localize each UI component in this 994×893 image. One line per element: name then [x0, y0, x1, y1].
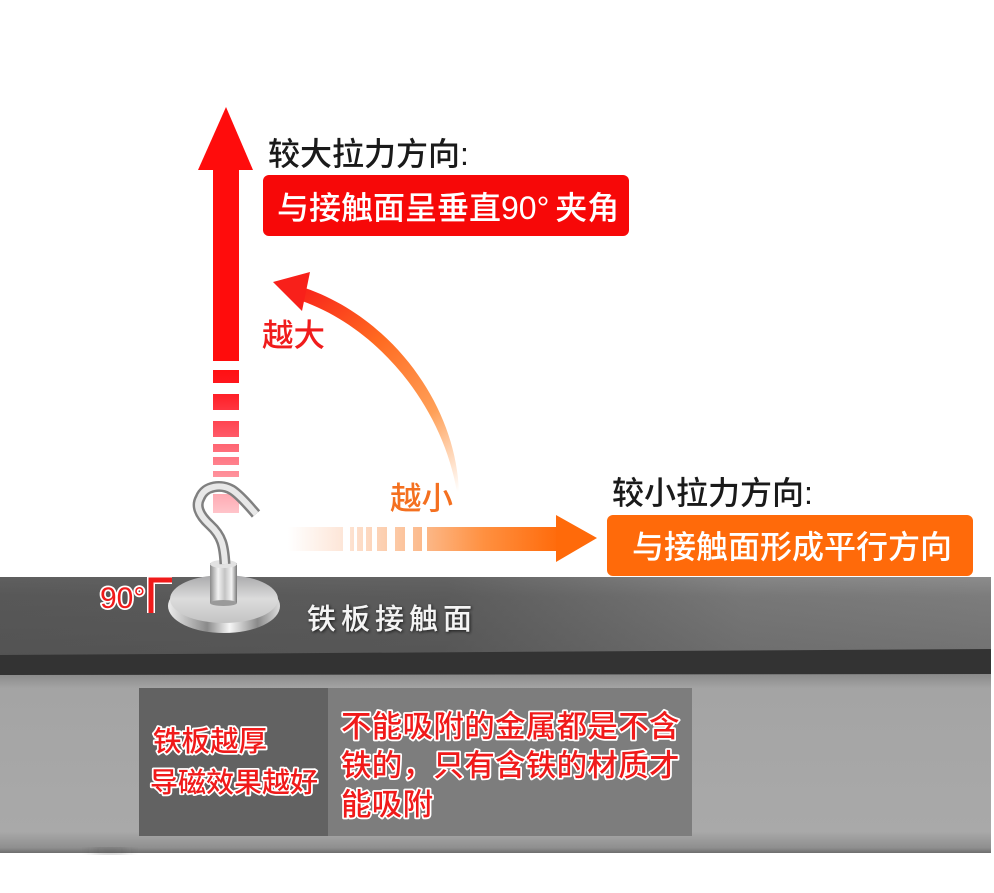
steel plate surface	[0, 577, 991, 853]
angle label: 90 degrees: 90°	[100, 582, 145, 615]
label: iron plate contact surface: 铁板接触面	[307, 603, 477, 636]
panel: iron-only note: 能吸附	[341, 788, 433, 822]
callout: perpendicular 90 degrees	[263, 175, 629, 236]
orange rightward arrow: smaller pull direction	[288, 515, 597, 562]
panel: iron-only note	[341, 710, 680, 822]
label: larger: 越大	[262, 317, 325, 353]
heading: larger pull direction: 较大拉力方向:	[268, 136, 469, 172]
curved arrow: increasing pull	[273, 272, 459, 492]
panel: iron-only note: 铁的，只有含铁的材质才	[341, 749, 680, 783]
callout: parallel direction: 与接触面形成平行方向	[632, 529, 952, 565]
angle label: 90 degrees	[100, 580, 172, 615]
heading: smaller pull direction: 较小拉力方向:	[612, 475, 813, 511]
panel: thickness note: 导磁效果越好	[150, 767, 318, 798]
panel: thickness note	[139, 688, 328, 836]
panel: iron-only note: 不能吸附的金属都是不含	[341, 710, 680, 744]
callout: perpendicular 90 degrees: 与接触面呈垂直90° 夹角	[277, 190, 619, 226]
panel: thickness note: 铁板越厚	[153, 726, 267, 758]
label: smaller: 越小	[390, 480, 453, 516]
red upward arrow: larger pull direction	[198, 107, 253, 513]
panel: notes	[139, 688, 692, 836]
callout: parallel direction	[607, 515, 973, 576]
icon: magnetic hook	[168, 486, 280, 633]
